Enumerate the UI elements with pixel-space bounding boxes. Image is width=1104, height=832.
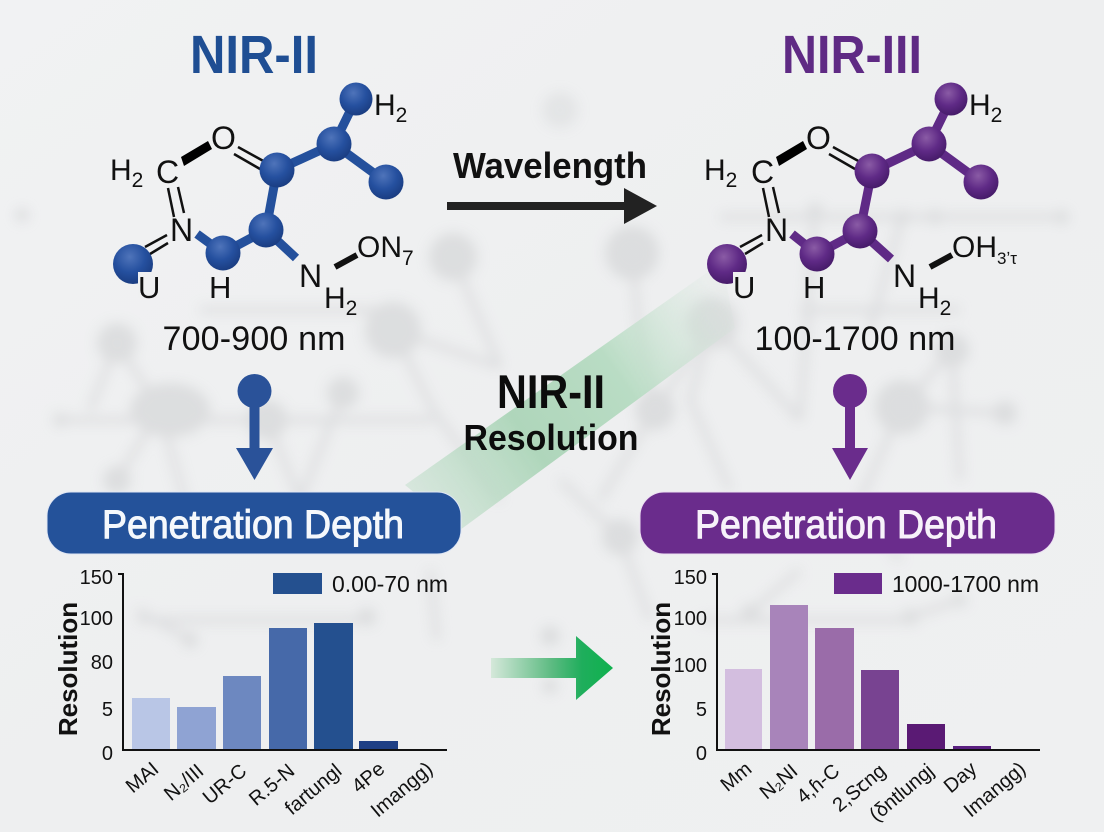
- molecule: NIR-II blue: O: [211, 120, 236, 156]
- bar chart: NIR-III resolution: [646, 567, 1040, 826]
- molecule: NIR-III purple: O: [806, 120, 831, 156]
- molecule: NIR-II blue: U: [138, 270, 160, 305]
- molecule: NIR-II blue: H: [209, 270, 231, 305]
- bar chart: NIR-III resolution: 100: [674, 655, 707, 677]
- molecule: NIR-III purple: 3ʼτ: [997, 249, 1017, 268]
- molecule: NIR-III purple: 2: [726, 169, 737, 192]
- molecule: NIR-III purple: 2: [940, 297, 951, 320]
- arrow: purple down: [832, 374, 868, 480]
- molecule: NIR-III purple: N: [765, 212, 788, 248]
- center label: NIR-II Resolution: [464, 365, 638, 458]
- molecule: NIR-III purple: C: [751, 154, 774, 190]
- molecule: NIR-II blue: [110, 82, 414, 320]
- molecule: NIR-III purple: H: [969, 89, 991, 122]
- bar chart: NIR-II resolution: 100: [80, 608, 113, 630]
- molecule: NIR-II blue: H: [374, 89, 396, 122]
- molecule: NIR-II blue: ON: [357, 231, 402, 264]
- molecule: NIR-II blue: C: [156, 154, 179, 190]
- bar chart: NIR-II resolution: 0.00-70 nm: [332, 571, 448, 597]
- range: 100-1700 nm: 100-1700 nm: [754, 320, 956, 358]
- molecule: NIR-III purple: U: [733, 270, 755, 305]
- background molecule network: [15, 92, 1069, 694]
- bar chart: NIR-II resolution: MAI: [122, 758, 163, 798]
- bar chart: NIR-II resolution: Imangg): [367, 758, 437, 822]
- bar chart: NIR-II resolution: fartungl: [281, 760, 346, 820]
- arrow: blue down: [236, 374, 273, 480]
- bar chart: NIR-III resolution: N₂NI: [756, 760, 802, 804]
- bar chart: NIR-II resolution: Resolution: [53, 602, 83, 736]
- arrow: green right: [491, 636, 613, 700]
- bar chart: NIR-II resolution: 5: [102, 699, 113, 721]
- molecule: NIR-III purple: H: [918, 282, 940, 315]
- molecule: NIR-II blue: 2: [346, 297, 357, 320]
- bar chart: NIR-III resolution: Imangg): [960, 758, 1030, 822]
- molecule: NIR-III purple: [704, 82, 1017, 320]
- bar chart: NIR-III resolution: 100: [674, 608, 707, 630]
- center label: NIR-II Resolution: Resolution: [464, 417, 638, 458]
- bar chart: NIR-III resolution: Day: [940, 758, 981, 798]
- bar chart: NIR-III resolution: 5: [696, 699, 707, 721]
- bar chart: NIR-II resolution: [53, 567, 448, 822]
- molecule: NIR-II blue: N: [170, 212, 193, 248]
- range: 700-900 nm: 700-900 nm: [162, 320, 346, 358]
- bar chart: NIR-II resolution: 0: [102, 743, 113, 765]
- bar chart: NIR-II resolution: N₂/III: [160, 760, 208, 805]
- molecule: NIR-II blue: H: [324, 282, 346, 315]
- panel: blue penetration depth: [47, 492, 461, 554]
- molecule: NIR-II blue: 2: [396, 104, 407, 127]
- molecule: NIR-II blue: N: [299, 258, 322, 294]
- green diagonal band: [405, 262, 735, 530]
- bar chart: NIR-III resolution: Mm: [717, 758, 756, 796]
- bar chart: NIR-II resolution: 4Pe: [348, 758, 389, 798]
- molecule: NIR-III purple: N: [893, 258, 916, 294]
- bar chart: NIR-III resolution: 4,ɦ-C: [793, 760, 844, 808]
- bar chart: NIR-II resolution: R.5-N: [245, 760, 299, 810]
- center label: NIR-II Resolution: NIR-II: [497, 365, 605, 418]
- bar chart: NIR-II resolution: 80: [91, 652, 113, 674]
- bar chart: NIR-III resolution: 2,Sꞇng: [829, 760, 890, 817]
- molecule: NIR-II blue: 2: [132, 169, 143, 192]
- molecule: NIR-II blue: 7: [402, 247, 414, 270]
- molecule: NIR-III purple: H: [803, 270, 825, 305]
- molecule: NIR-III purple: H: [704, 154, 726, 187]
- molecule: NIR-III purple: OH: [952, 231, 997, 264]
- bar chart: NIR-III resolution: 1000-1700 nm: [892, 571, 1039, 597]
- panel: purple penetration depth: [640, 492, 1055, 554]
- title: NIR-II: NIR-II: [190, 25, 318, 85]
- bar chart: NIR-III resolution: Resolution: [646, 602, 676, 736]
- bar chart: NIR-III resolution: 0: [696, 743, 707, 765]
- bar chart: NIR-III resolution: (δntlungj: [865, 760, 938, 826]
- molecule: NIR-III purple: 2: [991, 104, 1002, 127]
- panel: blue penetration depth: Penetration Depth: [102, 503, 404, 547]
- bar chart: NIR-II resolution: 150: [80, 567, 113, 589]
- bar chart: NIR-II resolution: UR-C: [199, 760, 251, 809]
- bar chart: NIR-III resolution: 150: [674, 567, 707, 589]
- molecule: NIR-II blue: H: [110, 154, 132, 187]
- title: NIR-III: NIR-III: [782, 25, 922, 85]
- panel: purple penetration depth: Penetration Depth: [695, 503, 997, 547]
- arrow: wavelength: [447, 188, 657, 224]
- wavelength label: Wavelength: [453, 145, 647, 186]
